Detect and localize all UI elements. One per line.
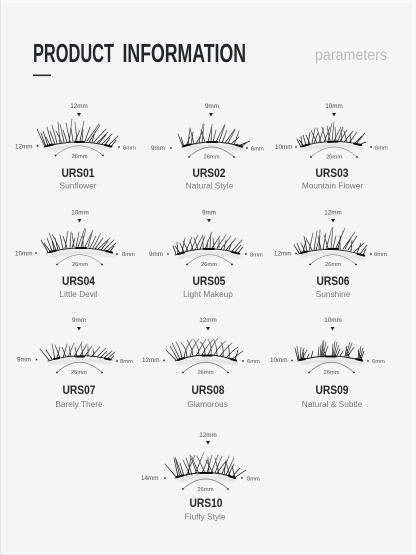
dimensions URS07: 9mm bbox=[17, 356, 31, 364]
product URS02 bbox=[151, 103, 264, 190]
dimensions URS04: 8mm bbox=[122, 252, 135, 258]
dimensions URS08: 6mm bbox=[247, 359, 260, 365]
dimensions URS05: 9mm bbox=[202, 210, 216, 216]
lash URS04 bbox=[41, 228, 116, 256]
product URS03 bbox=[275, 103, 388, 190]
code URS02: URS02 bbox=[192, 168, 226, 180]
title underline bbox=[33, 74, 51, 76]
product URS06 bbox=[274, 210, 387, 299]
dimensions URS09: 10mm bbox=[324, 317, 342, 324]
product URS04 bbox=[15, 210, 135, 299]
dimensions URS02: 6mm bbox=[251, 146, 264, 152]
code URS05: URS05 bbox=[192, 276, 226, 288]
lash URS03 bbox=[297, 122, 366, 150]
name URS04: Little Devil bbox=[59, 289, 98, 299]
dimensions URS08 bbox=[142, 317, 260, 376]
code URS10: URS10 bbox=[190, 498, 222, 510]
dimensions URS09: 26mm bbox=[323, 370, 340, 376]
dimensions URS03: 10mm bbox=[325, 103, 343, 110]
subtitle: parameters: parameters bbox=[315, 47, 387, 64]
title bbox=[33, 38, 246, 68]
name URS03: Mountain Flower bbox=[302, 180, 363, 190]
code URS01: URS01 bbox=[62, 168, 95, 180]
dimensions URS04 bbox=[15, 210, 135, 268]
dimensions URS05: 26mm bbox=[201, 262, 217, 268]
lash URS06 bbox=[294, 227, 367, 259]
lash URS07 bbox=[40, 342, 115, 364]
dimensions URS10: 12mm bbox=[199, 432, 217, 439]
dimensions URS07 bbox=[17, 317, 133, 376]
name URS02: Natural Style bbox=[186, 180, 234, 190]
dimensions URS03 bbox=[275, 103, 388, 160]
name URS09: Natural & Subtle bbox=[302, 399, 363, 409]
code URS09: URS09 bbox=[316, 385, 348, 397]
dimensions URS07: 26mm bbox=[71, 370, 87, 376]
code URS06: URS06 bbox=[316, 276, 350, 288]
dimensions URS02 bbox=[151, 103, 264, 160]
lash URS10 bbox=[165, 452, 246, 481]
dimensions URS05: 8mm bbox=[250, 252, 263, 258]
dimensions URS02: 26mm bbox=[203, 154, 220, 160]
lash URS08 bbox=[166, 338, 243, 364]
dimensions URS09: 6mm bbox=[372, 359, 385, 365]
dimensions URS10: 8mm bbox=[247, 476, 260, 482]
dimensions URS10 bbox=[141, 432, 260, 493]
lash URS01 bbox=[37, 119, 118, 150]
dimensions URS03: 10mm bbox=[275, 144, 292, 151]
dimensions URS05: 9mm bbox=[149, 251, 163, 258]
lash URS02 bbox=[178, 124, 250, 150]
dimensions URS06: 8mm bbox=[374, 252, 387, 258]
dimensions URS04: 26mm bbox=[72, 262, 88, 268]
code URS03: URS03 bbox=[316, 168, 348, 180]
dimensions URS06: 26mm bbox=[325, 262, 341, 268]
title: PRODUCT bbox=[33, 38, 114, 68]
dimensions URS04: 10mm bbox=[15, 250, 32, 258]
code URS08: URS08 bbox=[192, 385, 225, 397]
dimensions URS08: 26mm bbox=[197, 370, 214, 376]
dimensions URS09: 10mm bbox=[270, 357, 288, 364]
lash URS05 bbox=[173, 232, 243, 258]
dimensions URS01: 12mm bbox=[15, 144, 32, 150]
name URS10: Fluffy Style bbox=[185, 512, 226, 522]
product URS01 bbox=[15, 103, 136, 190]
dimensions URS06: 12mm bbox=[274, 250, 292, 258]
product URS08 bbox=[142, 317, 260, 409]
product URS10 bbox=[141, 432, 260, 522]
product URS05 bbox=[149, 210, 263, 299]
dimensions URS06: 12mm bbox=[324, 210, 342, 216]
dimensions URS02: 9mm bbox=[205, 103, 219, 110]
dimensions URS09 bbox=[270, 317, 385, 376]
dimensions URS01: 26mm bbox=[71, 154, 88, 160]
code URS07: URS07 bbox=[62, 385, 96, 397]
dimensions URS10: 14mm bbox=[141, 475, 158, 482]
name URS05: Light Makeup bbox=[183, 289, 233, 299]
name URS06: Sunshine bbox=[316, 289, 351, 299]
dimensions URS07: 8mm bbox=[120, 359, 133, 365]
name URS08: Glamorous bbox=[187, 399, 228, 409]
dimensions URS05 bbox=[149, 210, 263, 268]
name URS01: Sunflower bbox=[60, 180, 97, 190]
name URS07: Barely There bbox=[55, 399, 103, 409]
dimensions URS01 bbox=[15, 103, 136, 160]
dimensions URS03: 26mm bbox=[326, 154, 342, 160]
product URS09 bbox=[270, 317, 385, 409]
dimensions URS01: 6mm bbox=[123, 146, 136, 152]
dimensions URS04: 10mm bbox=[71, 210, 89, 216]
dimensions URS08: 12mm bbox=[199, 317, 217, 324]
dimensions URS07: 9mm bbox=[72, 317, 86, 324]
dimensions URS10: 26mm bbox=[197, 487, 214, 493]
dimensions URS03: 6mm bbox=[375, 146, 388, 152]
title: INFORMATION bbox=[122, 38, 246, 68]
product URS07 bbox=[17, 317, 133, 409]
lash URS09 bbox=[295, 340, 364, 364]
code URS04: URS04 bbox=[62, 276, 96, 288]
dimensions URS06 bbox=[274, 210, 387, 268]
dimensions URS02: 9mm bbox=[151, 145, 165, 152]
dimensions URS01: 12mm bbox=[70, 103, 88, 110]
dimensions URS08: 12mm bbox=[142, 357, 160, 364]
